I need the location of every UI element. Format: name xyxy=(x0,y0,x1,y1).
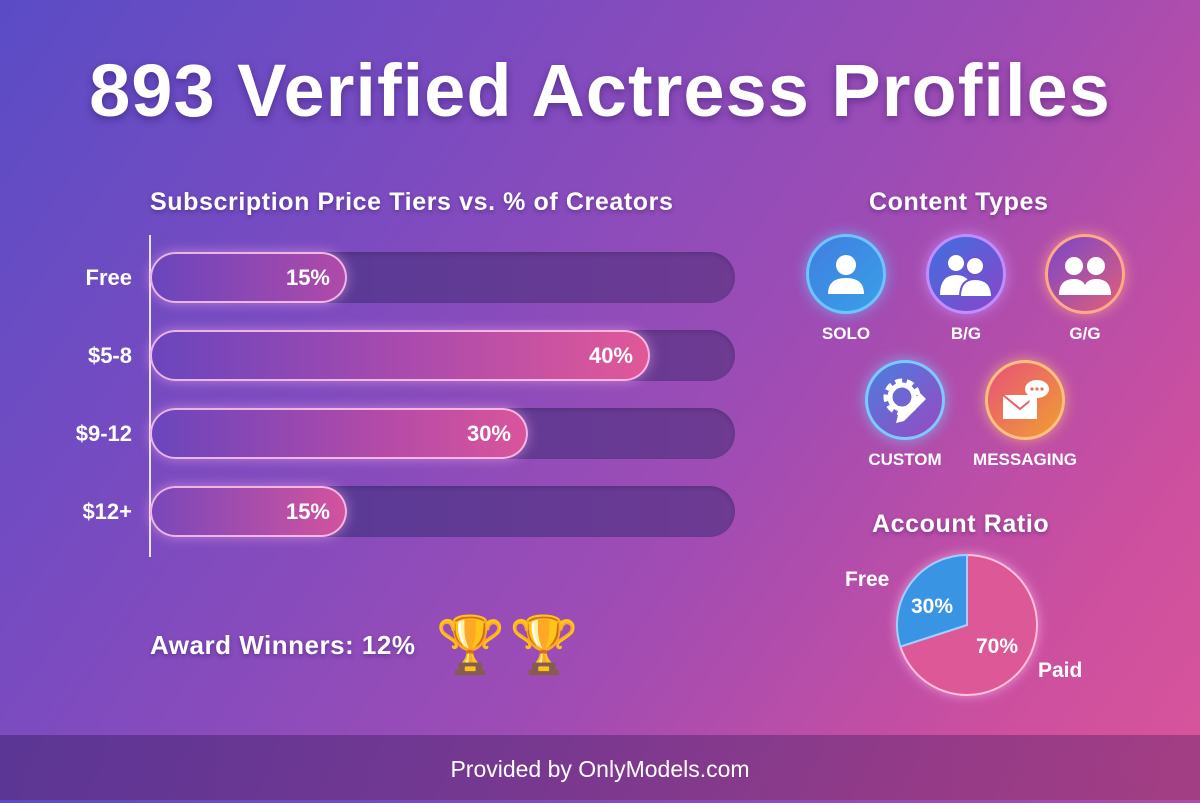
heading: account ratio: Account Ratio xyxy=(872,510,1049,538)
icon: solo: SOLO xyxy=(822,324,870,343)
pie chart: 70% xyxy=(976,635,1018,658)
bar chart labels xyxy=(76,265,132,524)
bar: $5-8 40% xyxy=(150,330,650,381)
heading: content types: Content Types xyxy=(869,188,1049,216)
heading: price tiers: Subscription Price Tiers vs. % of Creators xyxy=(150,188,674,216)
pie chart: 30% xyxy=(911,595,953,618)
pie chart xyxy=(845,548,1082,702)
bar: $9-12 30% xyxy=(150,408,528,459)
bar: $9-12 30%: 30% xyxy=(467,421,511,446)
icon: messaging: MESSAGING xyxy=(973,450,1077,469)
row: Free: Free xyxy=(86,265,132,290)
bar: Free 15% xyxy=(150,252,347,303)
footer xyxy=(0,735,1200,800)
icon: custom xyxy=(857,352,953,469)
icon: G/G: G/G xyxy=(1069,324,1101,343)
icon: solo xyxy=(798,226,894,343)
title: 893 Verified Actress Profiles xyxy=(89,49,1111,132)
award winners xyxy=(150,612,583,678)
row: $5-8: $5-8 xyxy=(88,343,132,368)
bar: $12+ 15% xyxy=(150,486,347,537)
bar: $12+ 15%: 15% xyxy=(286,499,330,524)
award winners: Award Winners: 12% xyxy=(150,630,415,660)
bar: Free 15%: 15% xyxy=(286,265,330,290)
pie chart: Paid xyxy=(1038,659,1082,682)
axis line xyxy=(149,235,151,557)
row: $9-12: $9-12 xyxy=(76,421,132,446)
bar: $5-8 40%: 40% xyxy=(589,343,633,368)
row: $12+: $12+ xyxy=(82,499,132,524)
footer: Provided by OnlyModels.com xyxy=(450,756,750,782)
icon: trophies: 🏆🏆 xyxy=(435,612,583,678)
icon: B/G xyxy=(920,228,1012,343)
icon: custom: CUSTOM xyxy=(868,450,942,469)
icon: G/G xyxy=(1038,227,1132,343)
icon: B/G: B/G xyxy=(951,324,981,343)
pie chart: Free xyxy=(845,568,889,591)
icon: messaging xyxy=(973,352,1077,469)
